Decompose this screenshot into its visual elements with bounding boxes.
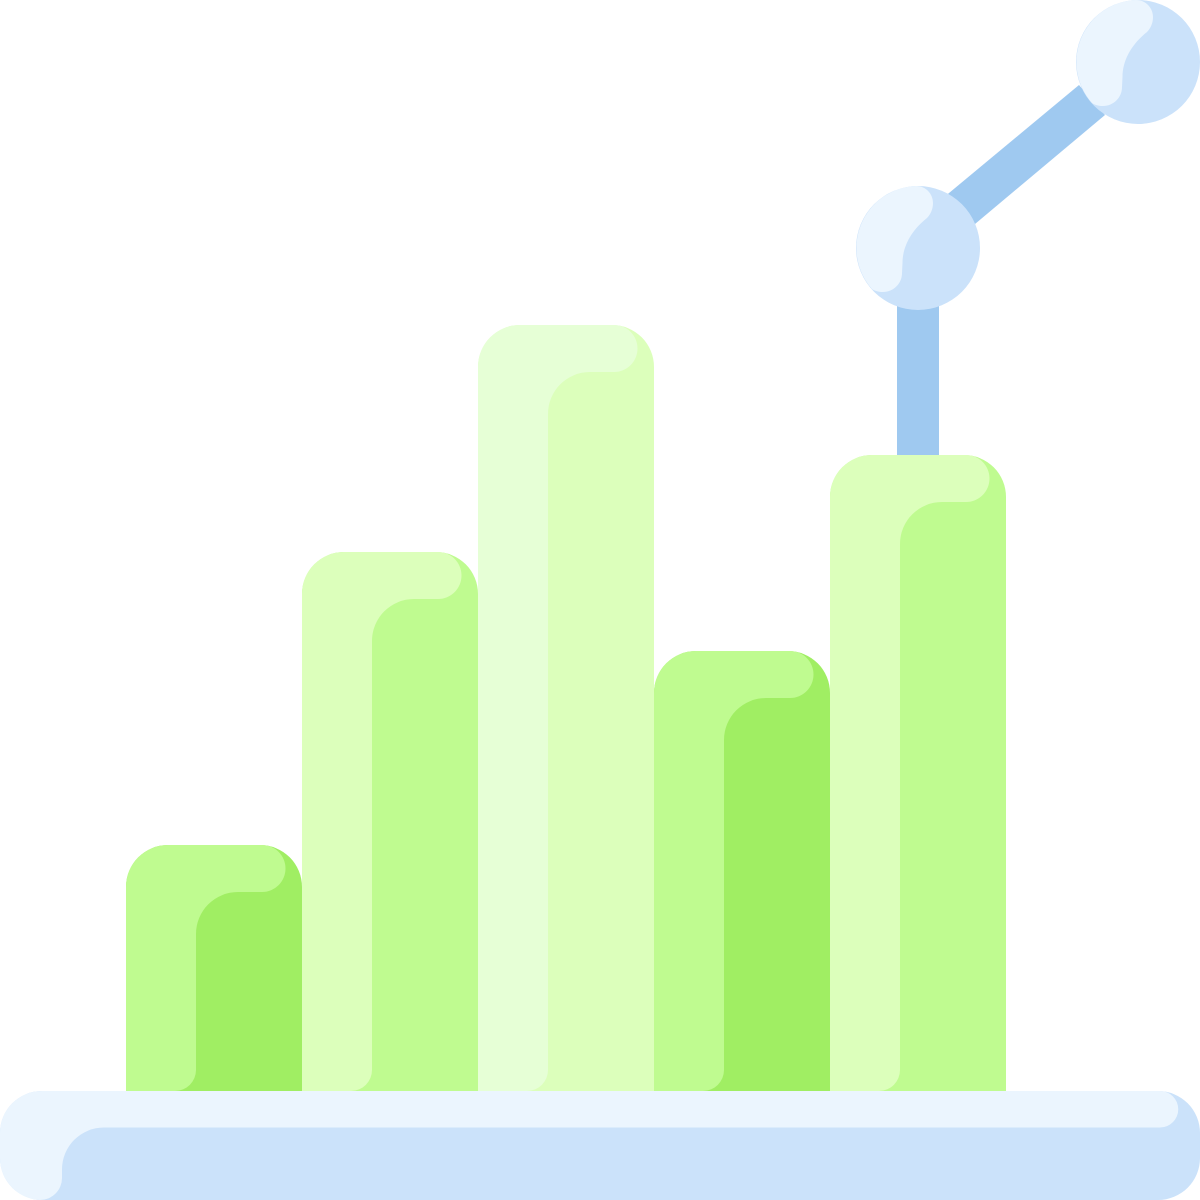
trend line with two nodes	[856, 0, 1200, 465]
shelf base	[0, 1091, 1200, 1200]
bar 1	[126, 845, 302, 1091]
bar 5	[830, 455, 1006, 1091]
bar 2	[302, 552, 478, 1091]
bar 3	[478, 325, 654, 1091]
connector: diagonal link	[940, 85, 1105, 245]
bar 4	[654, 651, 830, 1091]
connector: vertical stem	[897, 290, 939, 465]
node: lower circle	[856, 186, 980, 310]
node: upper circle	[1076, 0, 1200, 124]
